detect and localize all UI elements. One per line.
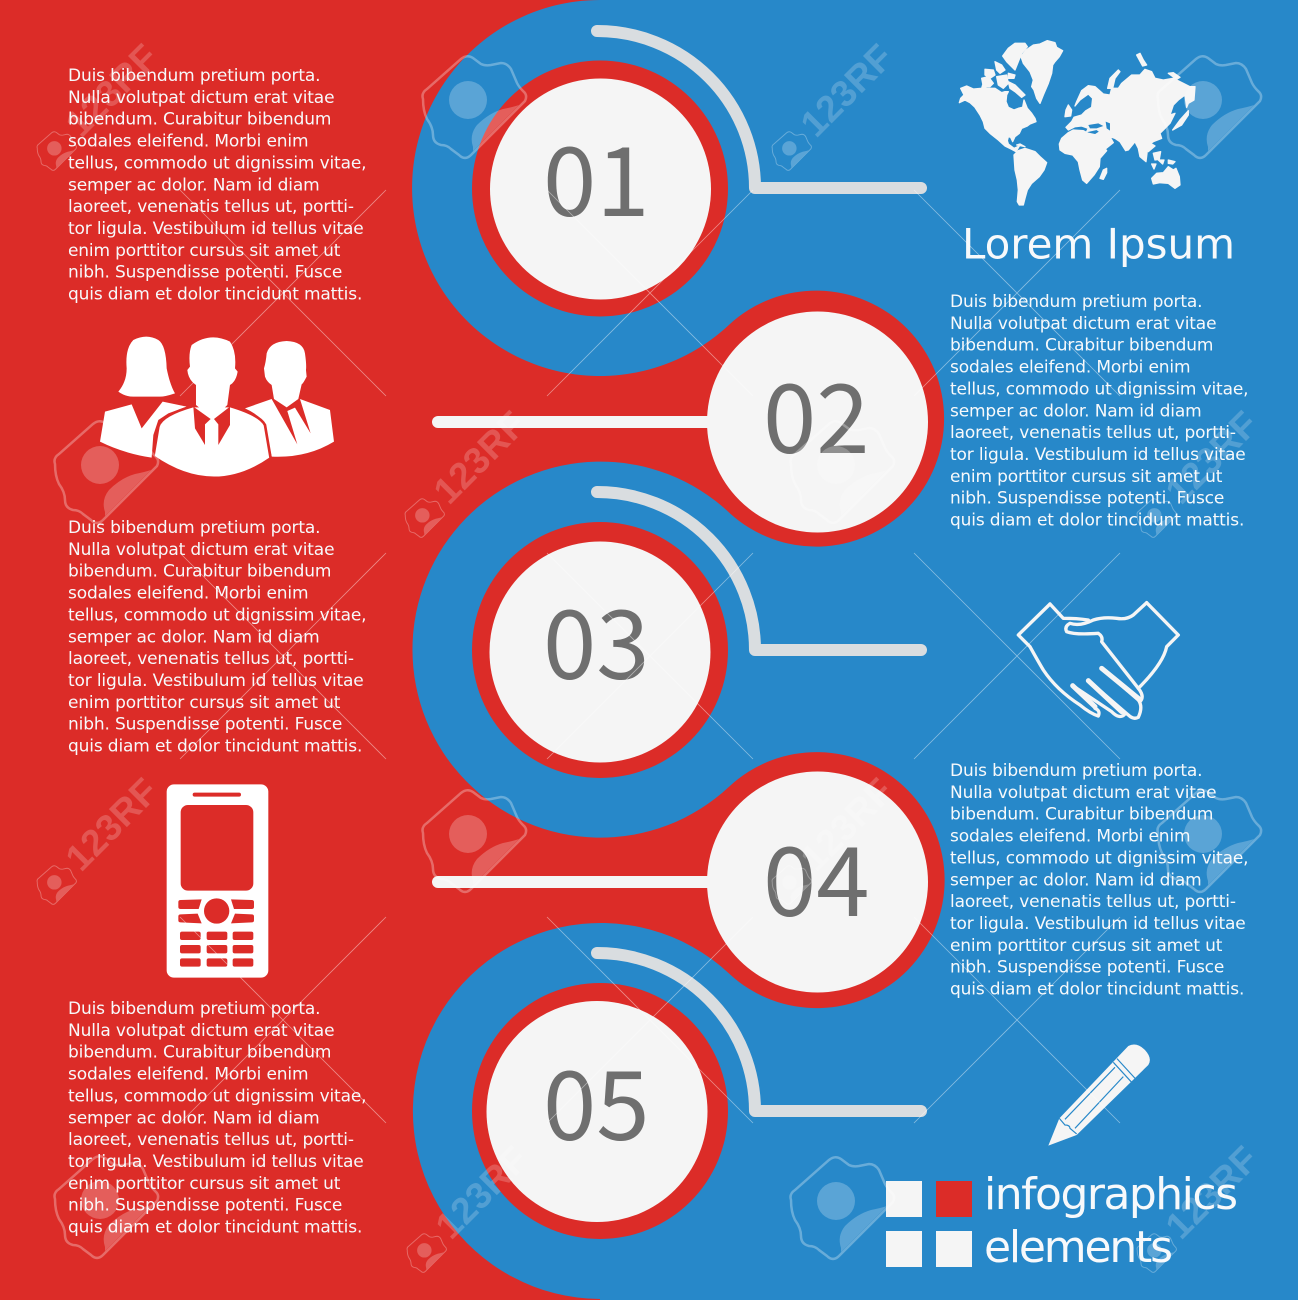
logo text: infographics elements: elements xyxy=(984,1222,1173,1273)
text block: right 2: Nulla volutpat dictum erat vitae xyxy=(950,783,1216,803)
watermark stamps: 123RF xyxy=(58,36,166,145)
heading: Lorem Ipsum: Lorem Ipsum xyxy=(962,220,1235,268)
text block: right 2: tellus, commodo ut dignissim vitae, xyxy=(950,848,1248,868)
text block: left 1: Nulla volutpat dictum erat vitae xyxy=(68,88,334,108)
text block: right 2: sodales eleifend. Morbi enim xyxy=(950,827,1190,847)
watermark stamps: 123RF xyxy=(426,403,534,512)
text block: right 1: nibh. Suspendisse potenti. Fusce xyxy=(950,489,1224,509)
step 01 badge xyxy=(472,60,728,316)
text block: right 1: quis diam et dolor tincidunt mattis. xyxy=(950,510,1244,530)
icon: business people xyxy=(100,337,334,478)
text block: left 1: tor ligula. Vestibulum id tellus vitae xyxy=(68,219,364,239)
icon: handshake xyxy=(1018,603,1178,718)
text block: left 3: semper ac dolor. Nam id diam xyxy=(68,1108,320,1128)
text block: left 3: nibh. Suspendisse potenti. Fusce xyxy=(68,1196,342,1216)
text block: left 2: tor ligula. Vestibulum id tellus vitae xyxy=(68,671,364,691)
text block: right 1: sodales eleifend. Morbi enim xyxy=(950,358,1190,378)
text block: left 3: Nulla volutpat dictum erat vitae xyxy=(68,1021,334,1041)
text block: left 1: enim porttitor cursus sit amet ut xyxy=(68,241,341,261)
text block: left 1: laoreet, venenatis tellus ut, portti- xyxy=(68,197,354,217)
text block: right 1: tor ligula. Vestibulum id tellus vitae xyxy=(950,445,1246,465)
step 05 badge xyxy=(472,983,728,1239)
icon: pencil xyxy=(1048,1045,1150,1146)
logo: four squares xyxy=(886,1181,972,1267)
step 01 connector line xyxy=(597,31,921,188)
text block: left 3: enim porttitor cursus sit amet ut xyxy=(68,1174,341,1194)
text block: left 3: tellus, commodo ut dignissim vitae, xyxy=(68,1086,366,1106)
step 04 number: 04 xyxy=(763,805,870,944)
text block: left 2: nibh. Suspendisse potenti. Fusce xyxy=(68,715,342,735)
text block: left 3: quis diam et dolor tincidunt mattis. xyxy=(68,1218,362,1238)
text block: right 1: semper ac dolor. Nam id diam xyxy=(950,401,1202,421)
text block: right 2: bibendum. Curabitur bibendum xyxy=(950,805,1213,825)
step 02 number: 02 xyxy=(763,342,870,481)
text block: left 2: semper ac dolor. Nam id diam xyxy=(68,627,320,647)
watermark stamps: 123RF xyxy=(793,770,901,879)
text block: left 2: tellus, commodo ut dignissim vitae, xyxy=(68,605,366,625)
step 03 badge xyxy=(472,522,728,778)
icon: mobile phone xyxy=(167,784,268,978)
text block: left 2: quis diam et dolor tincidunt mattis. xyxy=(68,736,362,756)
text block: left 3: laoreet, venenatis tellus ut, portti- xyxy=(68,1130,354,1150)
watermark stamps: 123RF xyxy=(1158,403,1266,512)
text block: left 1: sodales eleifend. Morbi enim xyxy=(68,132,308,152)
text block: right 1: enim porttitor cursus sit amet ut xyxy=(950,467,1223,487)
text block: left 1: quis diam et dolor tincidunt mattis. xyxy=(68,284,362,304)
text block: left 2: bibendum. Curabitur bibendum xyxy=(68,562,331,582)
text block: right 2: quis diam et dolor tincidunt mattis. xyxy=(950,980,1244,1000)
text block: right 2: laoreet, venenatis tellus ut, portti- xyxy=(950,892,1236,912)
text block: right 2: semper ac dolor. Nam id diam xyxy=(950,870,1202,890)
text block: right 2: nibh. Suspendisse potenti. Fusce xyxy=(950,958,1224,978)
watermark stamps: 123RF xyxy=(793,36,901,145)
text block: left 2: laoreet, venenatis tellus ut, portti- xyxy=(68,649,354,669)
text block: right 1: tellus, commodo ut dignissim vitae, xyxy=(950,379,1248,399)
text block: left 2: sodales eleifend. Morbi enim xyxy=(68,584,308,604)
woman figure xyxy=(100,337,187,458)
text block: left 1: nibh. Suspendisse potenti. Fusce xyxy=(68,263,342,283)
text block: left 3: sodales eleifend. Morbi enim xyxy=(68,1065,308,1085)
step 02 badge xyxy=(432,312,928,532)
text block: right 1: laoreet, venenatis tellus ut, portti- xyxy=(950,423,1236,443)
text block: left 1: Duis bibendum pretium porta. xyxy=(68,66,320,86)
step 03 connector line xyxy=(597,492,921,650)
watermark stamps: 123RF xyxy=(1158,1138,1266,1247)
text block: left 1: semper ac dolor. Nam id diam xyxy=(68,175,320,195)
background: red panel with scalloped edge xyxy=(0,0,945,1300)
man figure centre xyxy=(153,337,271,478)
watermark lattice lines xyxy=(180,190,1120,1123)
text block: left 3: bibendum. Curabitur bibendum xyxy=(68,1043,331,1063)
text block: right 2: tor ligula. Vestibulum id tellus vitae xyxy=(950,914,1246,934)
text block: left 1: bibendum. Curabitur bibendum xyxy=(68,110,331,130)
watermark stamps: 123RF xyxy=(428,1138,536,1247)
text block: left 2: enim porttitor cursus sit amet ut xyxy=(68,693,341,713)
text block: right 2: Duis bibendum pretium porta. xyxy=(950,761,1202,781)
step 05 number: 05 xyxy=(543,1029,650,1168)
step 01 number: 01 xyxy=(543,105,650,244)
text block: right 1: Duis bibendum pretium porta. xyxy=(950,292,1202,312)
step 04 badge xyxy=(432,772,928,992)
text block: left 3: tor ligula. Vestibulum id tellus vitae xyxy=(68,1152,364,1172)
watermark stamps: 123RF xyxy=(58,770,166,879)
icon: world map xyxy=(959,41,1195,205)
text block: left 1: tellus, commodo ut dignissim vitae, xyxy=(68,153,366,173)
text block: left 2: Nulla volutpat dictum erat vitae xyxy=(68,540,334,560)
text block: left 2: Duis bibendum pretium porta. xyxy=(68,518,320,538)
logo text: infographics elements xyxy=(984,1169,1238,1273)
text block: right 2: enim porttitor cursus sit amet ut xyxy=(950,936,1223,956)
text block: left 3: Duis bibendum pretium porta. xyxy=(68,999,320,1019)
logo text: infographics elements: infographics xyxy=(984,1169,1238,1220)
text block: right 1: Nulla volutpat dictum erat vitae xyxy=(950,314,1216,334)
man figure right xyxy=(245,341,334,457)
step 03 number: 03 xyxy=(543,568,650,707)
step 05 connector line xyxy=(597,953,921,1111)
text block: right 1: bibendum. Curabitur bibendum xyxy=(950,336,1213,356)
